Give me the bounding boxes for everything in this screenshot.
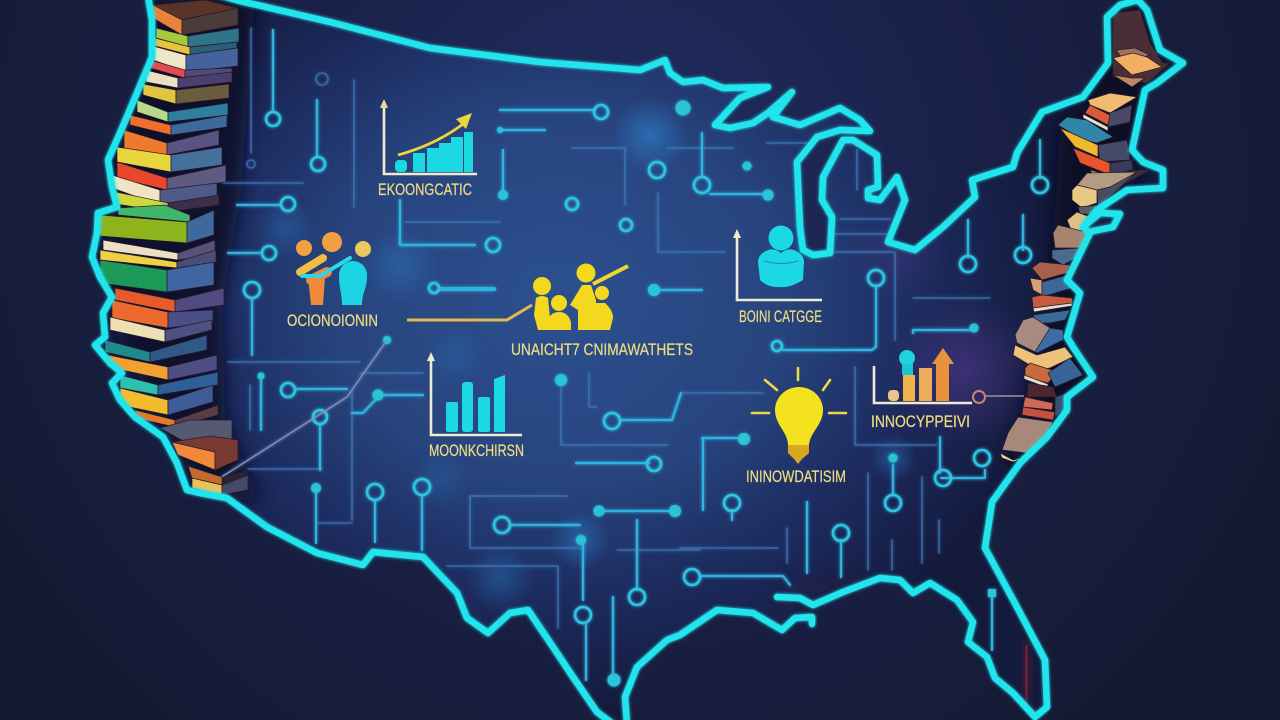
label: orange arrow chart: INNOCYPPEIVI — [871, 412, 970, 431]
label: people icon: OCIONOIONIN — [287, 311, 378, 330]
icon: four-bar chart — [427, 352, 522, 435]
label: person icon: BOINI CATGGE — [739, 307, 822, 326]
ring nodes — [244, 105, 1048, 623]
icon: family with rising line — [407, 264, 628, 330]
faint background wires — [223, 28, 990, 628]
icon: orange arrow chart — [874, 348, 1024, 403]
label: light bulb: ININOWDATISIM — [746, 467, 846, 486]
icon: two people — [296, 232, 371, 305]
icon: light bulb — [752, 368, 846, 464]
dot nodes — [258, 100, 996, 686]
circuit traces — [220, 28, 1048, 686]
label: family icon: UNAICHT7 CNIMAWATHETS — [511, 340, 693, 359]
left book stack — [100, 0, 248, 495]
label: top chart: EKOONGCATIC — [378, 180, 472, 199]
diagonal connector — [220, 340, 387, 478]
right book stack — [1000, 10, 1170, 462]
icon: person on axes — [733, 226, 822, 300]
label: four-bar chart: MOONKCHIRSN — [429, 441, 524, 460]
icon: rising bar chart — [380, 99, 477, 174]
bright wires — [228, 30, 1040, 680]
